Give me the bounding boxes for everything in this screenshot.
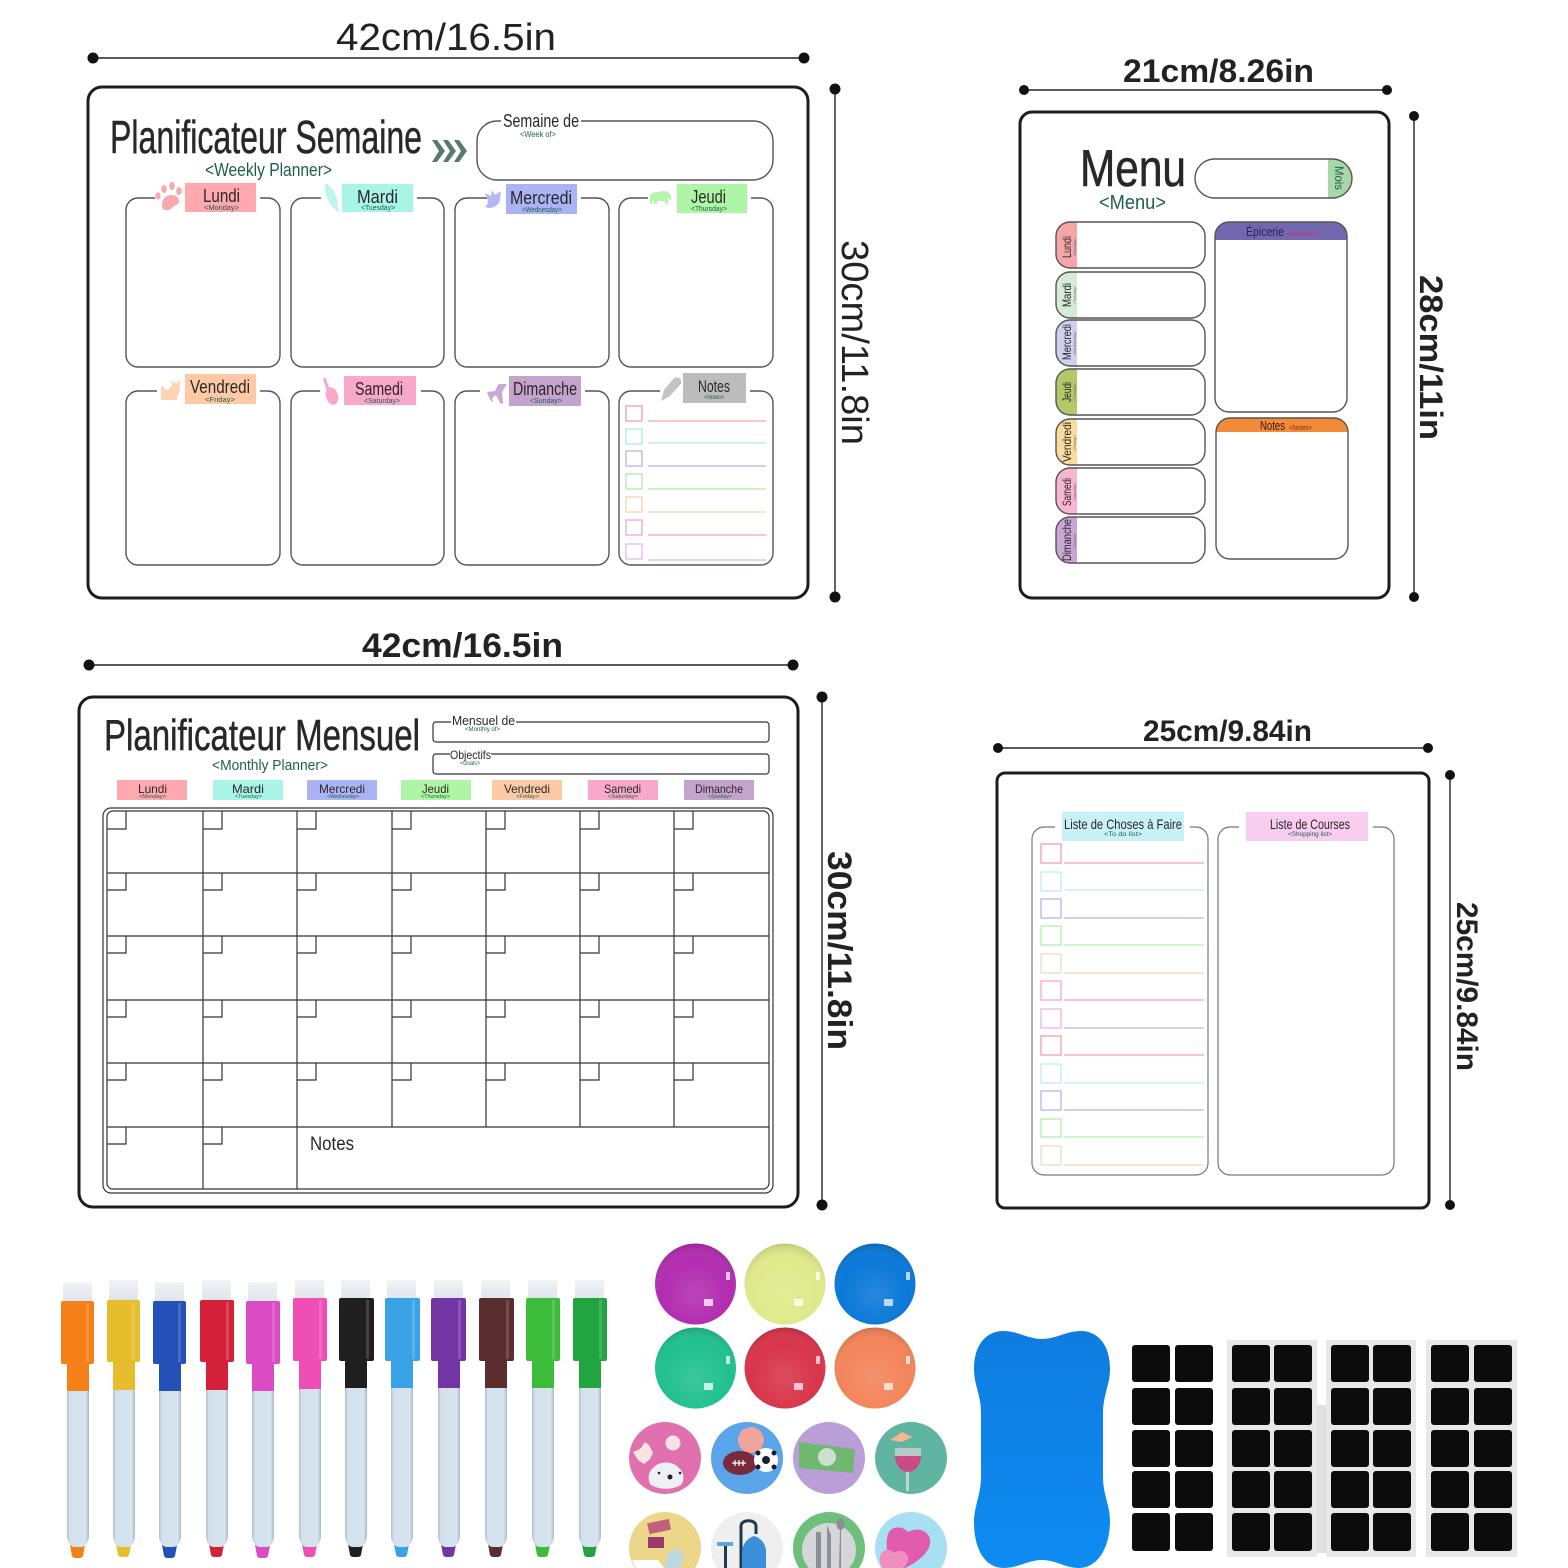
- day box: Mardi: [291, 184, 444, 367]
- panel: list planner: [997, 773, 1429, 1208]
- row: Samedi: <Saturday>: [1072, 482, 1077, 501]
- row: Mercredi: <Wednesday>: [1072, 330, 1077, 355]
- row: Vendredi: <Friday>: [1072, 434, 1077, 451]
- day label: Samedi: [588, 780, 658, 800]
- day box: Mercredi: <Wednesday>: [522, 207, 562, 214]
- marker: yellow: [107, 1280, 140, 1557]
- row: Dimanche: Dimanche: [1060, 519, 1074, 561]
- row: Samedi: Samedi: [1060, 478, 1074, 506]
- marker: brown: [479, 1280, 514, 1557]
- day box: Mercredi: Mercredi: [510, 188, 572, 208]
- dimension: height of list planner: [1445, 770, 1483, 1210]
- sticker sheet 1: [1132, 1345, 1213, 1551]
- day label: Mardi: [213, 780, 283, 800]
- day label: Dimanche: Dimanche: [695, 782, 743, 796]
- field: Objectifs: Objectifs: [450, 748, 491, 762]
- dimension: height of weekly planner: 30cm/11.8in: [833, 240, 875, 445]
- day label: Lundi: <Monday>: [139, 794, 166, 800]
- row: Lundi: [1056, 222, 1205, 268]
- day label: Mardi: Mardi: [232, 782, 264, 796]
- title: Planificateur Mensuel: Planificateur Mensuel: [104, 711, 420, 760]
- dimension: width of monthly planner: 42cm/16.5in: [362, 627, 563, 665]
- day box: Jeudi: <Thursday>: [691, 206, 727, 213]
- day box: Samedi: <Saturday>: [364, 398, 400, 405]
- day label: Dimanche: <Sunday>: [708, 794, 732, 800]
- field: Mensuel de: <Monthly of>: [465, 727, 501, 733]
- magnet: money: [793, 1422, 865, 1494]
- panel: menu planner: [1020, 112, 1389, 598]
- marker: pink: [293, 1280, 327, 1557]
- marker: sky blue: [385, 1280, 420, 1557]
- magnet: pets: [629, 1422, 701, 1494]
- dimension: height of monthly planner: 30cm/11.8in: [820, 851, 858, 1050]
- subtitle: weekly planner: <Weekly Planner>: [205, 160, 332, 180]
- magnet: coral: [834, 1328, 916, 1408]
- row: Jeudi: [1056, 369, 1205, 415]
- day label: Mardi: <Tuesday>: [235, 794, 262, 800]
- day label: Lundi: Lundi: [138, 782, 167, 796]
- notes label: Notes: [310, 1134, 354, 1155]
- dimension: height of list planner: 25cm/9.84in: [1450, 902, 1483, 1071]
- marker: purple: [431, 1280, 466, 1557]
- row: Dimanche: [1056, 517, 1205, 563]
- day box: Vendredi: [126, 374, 280, 565]
- title: Planificateur Semaine: Planificateur Semaine: [110, 111, 422, 163]
- magnet: cocktail: [875, 1422, 947, 1494]
- dimension: height of menu planner: 28cm/11in: [1413, 275, 1449, 440]
- dimension: width of weekly planner: [88, 17, 810, 64]
- day box: Notes with checklist: Notes: [698, 377, 730, 396]
- row: Jeudi: Jeudi: [1060, 382, 1074, 402]
- calendar grid: [103, 808, 773, 1193]
- sticker sheet 2: [1227, 1340, 1317, 1557]
- subtitle: menu: <Menu>: [1099, 192, 1166, 214]
- row: Samedi: [1056, 468, 1205, 514]
- day label: Vendredi: [492, 780, 562, 800]
- day box: Lundi: [126, 183, 280, 367]
- dimension: width of monthly planner: [84, 627, 798, 670]
- subtitle: monthly planner: <Monthly Planner>: [212, 757, 328, 774]
- day box: Mardi: <Tuesday>: [361, 205, 395, 212]
- row: Lundi: <Monday>: [1072, 237, 1077, 256]
- row: Mercredi: Mercredi: [1060, 324, 1074, 360]
- row: Mardi: Mardi: [1060, 283, 1074, 307]
- marker: orange: [61, 1282, 94, 1558]
- sticker sheet 3: [1326, 1340, 1416, 1557]
- day box: Lundi: Lundi: [203, 186, 240, 206]
- list: shopping: Liste de Courses: [1270, 816, 1350, 832]
- row: Vendredi: [1056, 419, 1205, 465]
- magnet: magenta: [655, 1244, 736, 1324]
- field: Objectifs: [433, 748, 769, 774]
- day box: Dimanche: <Sunday>: [530, 398, 562, 405]
- day label: Samedi: Samedi: [604, 782, 641, 796]
- day box: Notes with checklist: [619, 373, 773, 565]
- icon: feather: [325, 183, 339, 212]
- icon: pen: [661, 377, 681, 401]
- panel: weekly planner: [88, 87, 808, 598]
- magnet: green: [655, 1328, 736, 1408]
- day box: Samedi: Samedi: [355, 379, 403, 399]
- list: to do: Liste de Choses à Faire: [1064, 816, 1182, 832]
- row: Mercredi: [1056, 320, 1205, 366]
- icon: dove: [485, 190, 501, 208]
- magnet: cutlery: [793, 1512, 865, 1568]
- illustrated round magnets: [629, 1422, 947, 1568]
- icon: paw: [155, 182, 182, 210]
- field: Objectifs: <Goals>: [460, 761, 480, 767]
- day label: Jeudi: [401, 780, 471, 800]
- box: Notes: Notes: [1260, 418, 1285, 433]
- row: Mardi: [1056, 272, 1205, 318]
- box: Epicerie: <Groceries>: [1286, 232, 1317, 238]
- field: week of: Semaine de: [503, 111, 579, 131]
- field: week of: [477, 111, 773, 180]
- dimension: width of menu planner: 21cm/8.26in: [1123, 53, 1314, 89]
- box: Epicerie: [1215, 222, 1347, 412]
- icon: plane: [487, 384, 507, 404]
- icon: chevrons: [432, 140, 467, 162]
- row: Vendredi: Vendredi: [1060, 422, 1074, 462]
- magnet: red: [744, 1328, 826, 1408]
- marker: blue: [153, 1282, 186, 1558]
- sticker sheet backing shadow: [1311, 1405, 1331, 1553]
- day label: Jeudi: Jeudi: [422, 782, 449, 796]
- box: Notes: [1216, 418, 1348, 559]
- day label: Vendredi: <Friday>: [516, 794, 539, 800]
- day label: Dimanche: [684, 780, 754, 800]
- day box: Jeudi: [619, 184, 773, 367]
- row: Jeudi: <Thursday>: [1072, 382, 1077, 401]
- magnet: cleaning: [711, 1512, 783, 1568]
- day box: Samedi: [291, 376, 444, 565]
- day label: Samedi: <Saturday>: [608, 794, 638, 800]
- magnet: lime: [744, 1244, 826, 1324]
- day label: Mercredi: [307, 780, 377, 800]
- day label: Jeudi: <Thursday>: [421, 794, 450, 800]
- dimension: width of list planner: [993, 715, 1433, 753]
- markers: [61, 1280, 607, 1558]
- eraser: [974, 1331, 1110, 1568]
- day box: Notes with checklist: <Notes>: [704, 395, 724, 401]
- list: shopping: <Shopping list>: [1288, 832, 1333, 838]
- row: Mardi: <Tuesday>: [1072, 285, 1077, 304]
- glossy round magnets: [655, 1244, 916, 1408]
- day box: Dimanche: [455, 376, 609, 565]
- marker: black: [339, 1280, 374, 1557]
- magnet: sports: [711, 1422, 783, 1494]
- dimension: width of list planner: 25cm/9.84in: [1143, 715, 1312, 748]
- day box: Vendredi: Vendredi: [190, 377, 250, 397]
- day box: Dimanche: Dimanche: [513, 379, 577, 399]
- icon: cat: [161, 380, 180, 400]
- dimension: height of menu planner: [1409, 111, 1449, 602]
- title: Menu: Menu: [1080, 140, 1186, 198]
- magnet: hearts: [875, 1512, 947, 1568]
- day box: Vendredi: <Friday>: [205, 397, 235, 404]
- icon: elephant: [650, 191, 671, 204]
- marker: dark green: [573, 1280, 607, 1557]
- row: Dimanche: <Sunday>: [1072, 532, 1077, 549]
- dimension: height of monthly planner: [816, 692, 858, 1210]
- box: Epicerie: Épicerie: [1246, 224, 1284, 239]
- magnet: blue: [834, 1244, 916, 1324]
- day label: Lundi: [117, 780, 187, 800]
- panel: monthly planner: [79, 697, 798, 1207]
- row: Lundi: Lundi: [1060, 236, 1074, 258]
- magnet: shopping: [629, 1512, 701, 1568]
- field: Mensuel de: [433, 713, 769, 742]
- field: month: Mois: [1332, 166, 1346, 190]
- day box: Jeudi: Jeudi: [691, 187, 726, 207]
- list: to do: [1032, 812, 1208, 1175]
- dimension: height of weekly planner: [830, 84, 875, 602]
- marker: orchid: [246, 1282, 280, 1558]
- box: Notes: <Notes>: [1289, 425, 1312, 432]
- field: month: [1195, 159, 1353, 198]
- marker: red: [200, 1280, 234, 1557]
- dimension: width of menu planner: [1019, 53, 1392, 95]
- field: week of: <Week of>: [520, 130, 556, 139]
- icon: guitar: [323, 378, 340, 406]
- list: shopping: [1218, 812, 1394, 1175]
- dimension: width of weekly planner: 42cm/16.5in: [336, 17, 556, 59]
- day label: Mercredi: Mercredi: [319, 782, 365, 796]
- marker: light green: [526, 1280, 560, 1557]
- field: Mensuel de: Mensuel de: [452, 713, 515, 728]
- list: to do: <To do list>: [1104, 832, 1143, 838]
- day box: Mercredi: [455, 184, 609, 367]
- day box: Lundi: <Monday>: [204, 205, 239, 212]
- day label: Mercredi: <Wednesday>: [327, 794, 359, 800]
- day label: Vendredi: Vendredi: [504, 782, 550, 796]
- sticker sheet 4: [1426, 1340, 1517, 1557]
- day box: Mardi: Mardi: [357, 187, 398, 207]
